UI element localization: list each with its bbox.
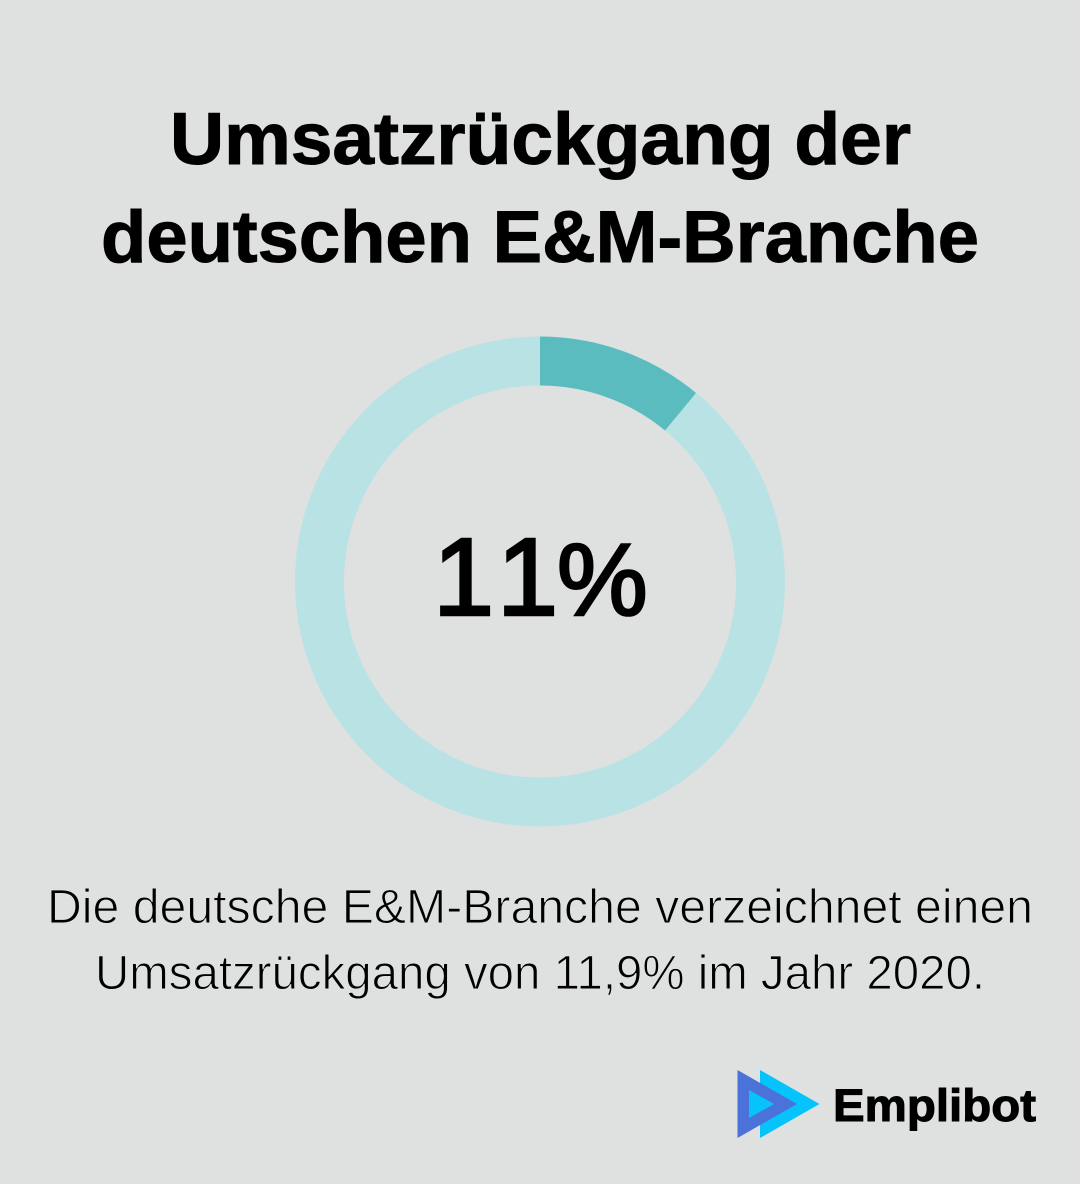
title: deutschen E&M-Branche — [101, 197, 979, 278]
logo wordmark: Emplibot — [833, 1080, 1036, 1131]
value: 11%: 11 — [433, 516, 558, 639]
title — [101, 99, 979, 278]
description text: Umsatzrückgang von 11,9% im Jahr 2020. — [95, 947, 985, 1000]
value: 11%: % — [557, 523, 648, 637]
description text — [47, 881, 1033, 1000]
donut chart: 11% — [320, 336, 760, 802]
icon: play triangles — [738, 1070, 820, 1138]
title: Umsatzrückgang der — [170, 99, 911, 180]
logo: Emplibot — [738, 1070, 1036, 1138]
description text: Die deutsche E&M-Branche verzeichnet einen — [47, 881, 1033, 934]
